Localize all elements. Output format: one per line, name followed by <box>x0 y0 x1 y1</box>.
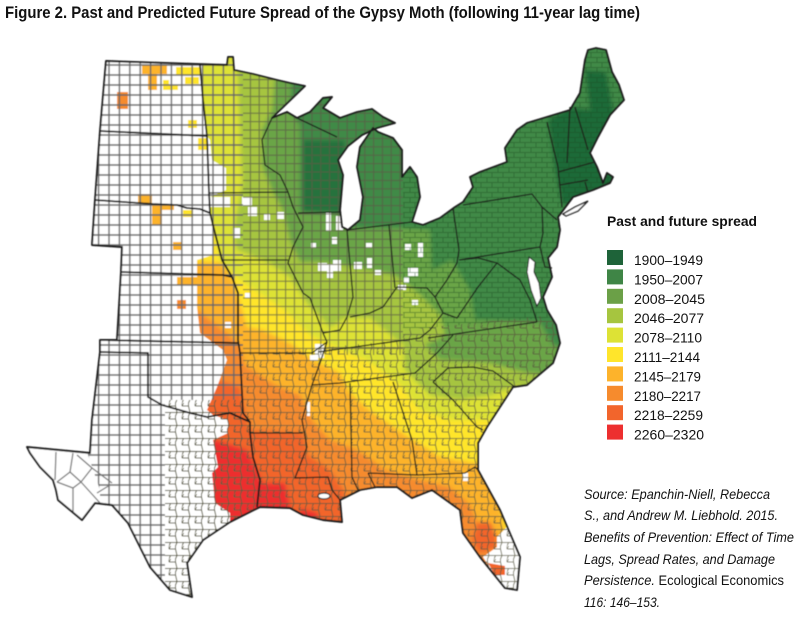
scattered western counties: yellow <box>163 67 207 217</box>
legend item 2008–2045 <box>607 289 705 307</box>
white gaps: counties without host trees <box>208 197 468 481</box>
source citation: Source: Epanchin-Niell, Rebecca <box>584 486 770 502</box>
source citation: Persistence. Ecological Economics <box>584 572 784 588</box>
southern Florida non-host area <box>483 527 522 593</box>
source citation: Lags, Spread Rates, and Damage <box>584 551 775 567</box>
western state borders <box>95 65 260 507</box>
legend item 2111–2144 <box>607 347 700 365</box>
legend item 2078–2110 <box>607 328 702 346</box>
legend item 2218–2259 <box>607 405 703 423</box>
legend item 1900–1949 <box>607 250 703 268</box>
legend item 2260–2320 <box>607 425 704 443</box>
legend item 2218–2259: 2218–2259 <box>634 407 703 423</box>
legend item 2180–2217: 2180–2217 <box>634 388 701 404</box>
source citation <box>584 486 794 610</box>
legend item 2260–2320: 2260–2320 <box>634 427 704 443</box>
source citation: S., and Andrew M. Liebhold. 2015. <box>584 507 778 523</box>
map coastline outline <box>27 48 624 597</box>
eastern state borders <box>209 107 595 500</box>
title: Figure 2. Past and Predicted Future Spread of the Gypsy Moth (following 11-year lag time) <box>5 3 640 22</box>
land base <box>28 48 624 596</box>
southern Florida late-spread county <box>488 563 505 575</box>
spread colour bands <box>196 48 624 576</box>
Lake Pontchartrain <box>318 493 330 499</box>
county lines <box>55 40 640 619</box>
legend item 2180–2217 <box>607 386 701 404</box>
legend item 2046–2077: 2046–2077 <box>634 310 704 326</box>
legend item 2078–2110: 2078–2110 <box>634 330 702 346</box>
scattered western counties: light orange <box>137 64 182 251</box>
map: counties shaded by spread period <box>25 46 626 599</box>
scattered western counties: orange <box>117 92 186 309</box>
legend item 1950–2007 <box>607 269 703 287</box>
Long Island <box>563 201 588 216</box>
legend item 1900–1949: 1900–1949 <box>634 252 703 268</box>
legend item 2111–2144: 2111–2144 <box>634 349 700 365</box>
source citation: 116: 146–153. <box>584 594 660 610</box>
legend item 2145–2179 <box>607 366 701 384</box>
legend item 1950–2007: 1950–2007 <box>634 271 703 287</box>
legend <box>607 213 757 443</box>
legend item 2046–2077 <box>607 308 704 326</box>
legend item 2145–2179: 2145–2179 <box>634 368 701 384</box>
legend item 2008–2045: 2008–2045 <box>634 291 705 307</box>
Chesapeake Bay <box>527 257 541 306</box>
legend heading: Past and future spread <box>607 213 757 229</box>
